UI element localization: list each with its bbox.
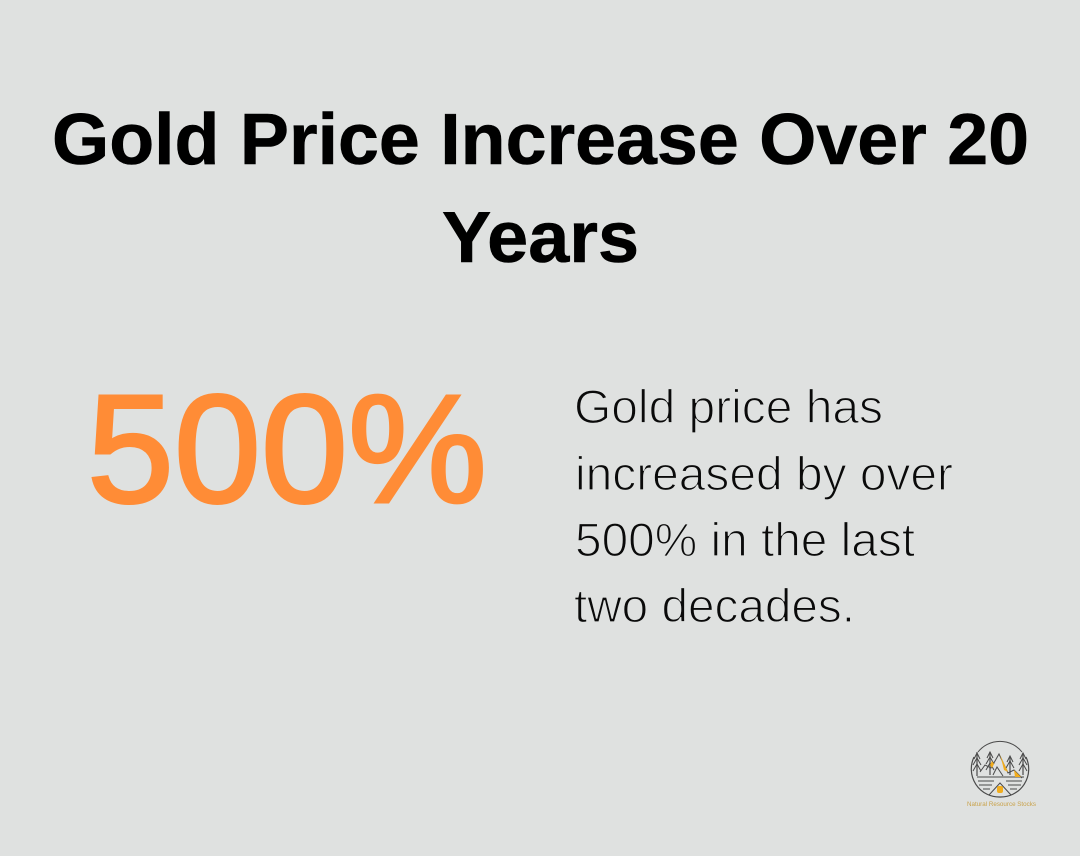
title: Years [442,198,639,278]
description text: two decades. [574,579,855,632]
big statistic: 500%: 500% [87,363,487,535]
logo: Natural Resource Stocks [967,741,1036,808]
description text: increased by over [575,447,953,500]
description text [574,380,953,632]
logo wordmark: Natural Resource Stocks [967,801,1036,808]
title: Gold Price Increase Over 20 [52,100,1029,180]
logo emblem [971,741,1029,797]
title [52,100,1029,278]
logo gold accents [990,755,1021,793]
description text: Gold price has [574,380,883,433]
description text: 500% in the last [575,513,915,566]
